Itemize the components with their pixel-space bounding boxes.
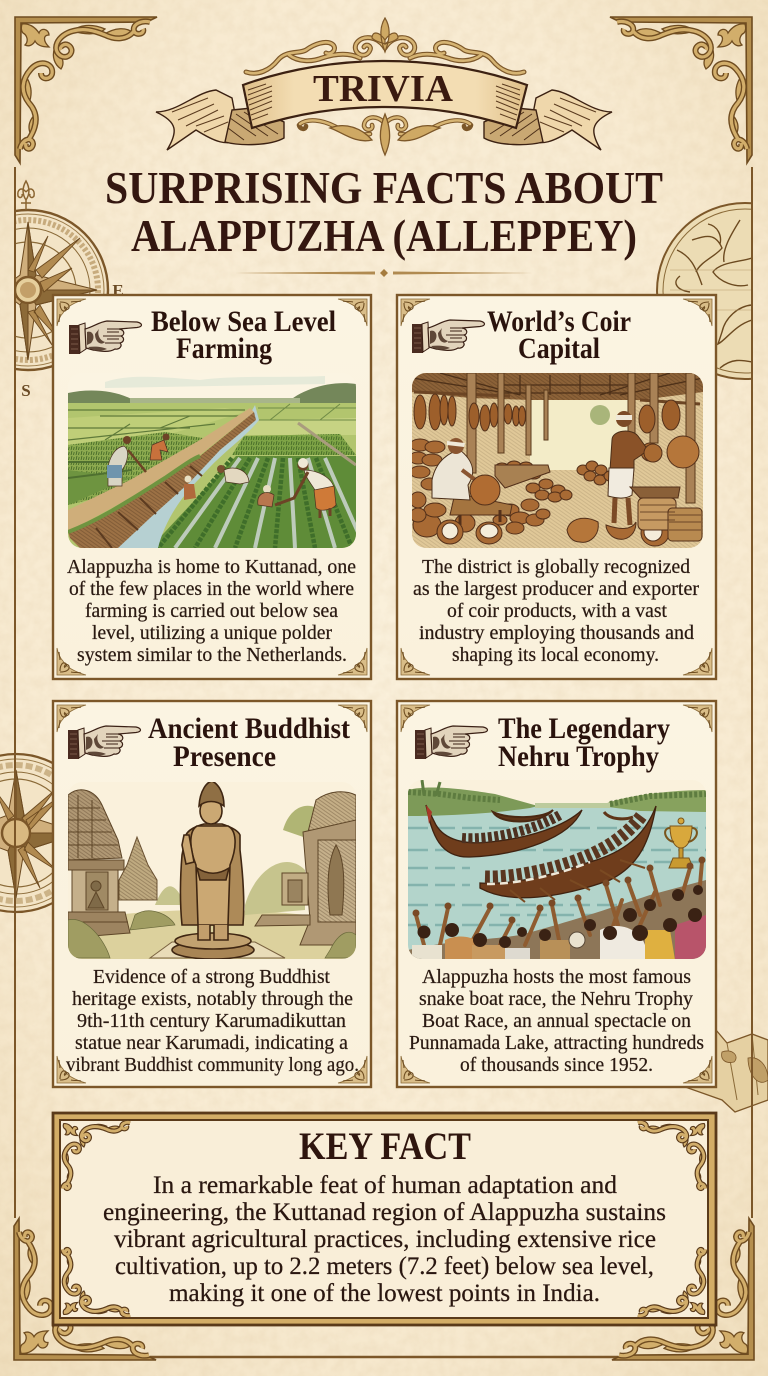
right shrine [255, 792, 356, 945]
panel corner ornaments [57, 299, 367, 675]
top flourish above banner [246, 18, 524, 73]
body text: level, utilizing a unique polder [92, 623, 333, 644]
heading [487, 305, 631, 365]
key fact body text: engineering, the Kuttanad region of Alappuzha sustains [103, 1199, 666, 1226]
main title: ALAPPUZHA (ALLEPPEY) [131, 211, 637, 261]
heading: Ancient Buddhist [148, 712, 350, 745]
main title: SURPRISING FACTS ABOUT [105, 163, 663, 213]
panel corner ornaments [401, 299, 712, 675]
illustration: coir workshop [409, 373, 703, 548]
heading: The Legendary [498, 712, 670, 745]
heading [151, 305, 336, 365]
far snake boat [426, 805, 582, 857]
key fact body text: making it one of the lowest points in India. [169, 1280, 600, 1307]
corner ornament: top right [610, 17, 752, 163]
panel: world's coir capital [397, 295, 716, 679]
heading: Nehru Trophy [498, 740, 659, 773]
near snake boat [480, 806, 656, 902]
right ribbon tail [528, 90, 612, 150]
heading: Capital [518, 332, 600, 365]
body text: of the few places in the world where [69, 579, 354, 600]
body text: Alappuzha hosts the most famous [422, 967, 691, 988]
heading: Farming [176, 332, 272, 365]
main title [105, 163, 663, 261]
heading: World’s Coir [487, 305, 631, 338]
compass letter E: E [112, 281, 124, 300]
body text: statue near Karumadi, indicating a [75, 1033, 348, 1054]
heading: Presence [173, 740, 276, 773]
trivia ribbon banner [156, 61, 612, 150]
body text: of coir products, with a vast [447, 601, 668, 622]
panel corner ornaments [57, 705, 367, 1083]
icon: pointing hand [68, 726, 140, 759]
panel: ancient buddhist presence [53, 701, 371, 1087]
compass rose: upper left [16, 180, 110, 372]
body text: Evidence of a strong Buddhist [93, 967, 331, 988]
corner ornament: bottom left [14, 1218, 156, 1360]
body text: vibrant Buddhist community long ago. [66, 1055, 359, 1076]
key fact body text: In a remarkable feat of human adaptation and [153, 1172, 618, 1199]
body text [67, 557, 356, 666]
body text: snake boat race, the Nehru Trophy [419, 989, 693, 1010]
illustration: buddha statue and ruins [68, 781, 356, 960]
heading [498, 712, 670, 773]
icon: pointing hand [415, 726, 488, 759]
body text: farming is carried out below sea [85, 601, 338, 622]
shrubs [68, 911, 356, 958]
panel: below sea level farming [53, 295, 371, 679]
compass rose: lower left [0, 754, 95, 912]
compass letter S: S [21, 381, 31, 400]
corner ornament: top left [15, 17, 157, 163]
title divider [235, 269, 533, 277]
folded map: lower right [688, 1030, 768, 1112]
body text: Alappuzha is home to Kuttanad, one [67, 557, 356, 578]
body text: shaping its local economy. [452, 645, 659, 666]
key fact body text: vibrant agricultural practices, including extensive rice [114, 1226, 656, 1253]
seated worker [432, 438, 500, 505]
left temple [68, 790, 130, 938]
body text: of thousands since 1952. [460, 1055, 653, 1076]
panel: key fact [53, 1113, 716, 1325]
standing worker [608, 411, 662, 525]
heading [148, 712, 350, 773]
illustration: snake boat race [408, 780, 706, 960]
corner ornament: bottom right [612, 1218, 754, 1360]
key fact body text: cultivation, up to 2.2 meters (7.2 feet) below sea level, [115, 1253, 654, 1280]
heading: Below Sea Level [151, 305, 336, 338]
panel corner ornaments [401, 705, 712, 1083]
icon: pointing hand [412, 320, 484, 353]
bottom flourish below banner [299, 114, 471, 155]
trophy [665, 818, 697, 868]
body text: heritage exists, notably through the [72, 989, 353, 1010]
body text: as the largest producer and exporter [413, 579, 700, 600]
globe map: upper right [656, 202, 751, 380]
crowd [408, 856, 706, 960]
small temple [119, 837, 157, 900]
body text [66, 967, 359, 1076]
statue [172, 781, 254, 959]
body text: 9th-11th century Karumadikuttan [77, 1011, 346, 1032]
baskets [630, 487, 702, 541]
ribbon folds [225, 108, 543, 145]
key fact corner ornaments [63, 1122, 705, 1316]
left ribbon tail [156, 90, 240, 150]
shells [437, 518, 669, 546]
panel: legendary nehru trophy [397, 701, 716, 1087]
body text: industry employing thousands and [419, 623, 694, 644]
farmers [107, 434, 336, 518]
ribbon main band [243, 61, 527, 128]
body text [413, 557, 700, 666]
body text: Boat Race, an annual spectacle on [422, 1011, 691, 1032]
body text [409, 967, 704, 1076]
body text: The district is globally recognized [422, 557, 690, 578]
illustration: rice paddies with farmers [68, 373, 365, 548]
body text: system similar to the Netherlands. [77, 645, 347, 666]
icon: pointing hand [69, 321, 142, 354]
trivia label: TRIVIA [313, 68, 454, 110]
key fact body text [103, 1172, 666, 1307]
key fact heading: KEY FACT [299, 1125, 471, 1168]
body text: Punnamada Lake, attracting hundreds [409, 1033, 704, 1054]
